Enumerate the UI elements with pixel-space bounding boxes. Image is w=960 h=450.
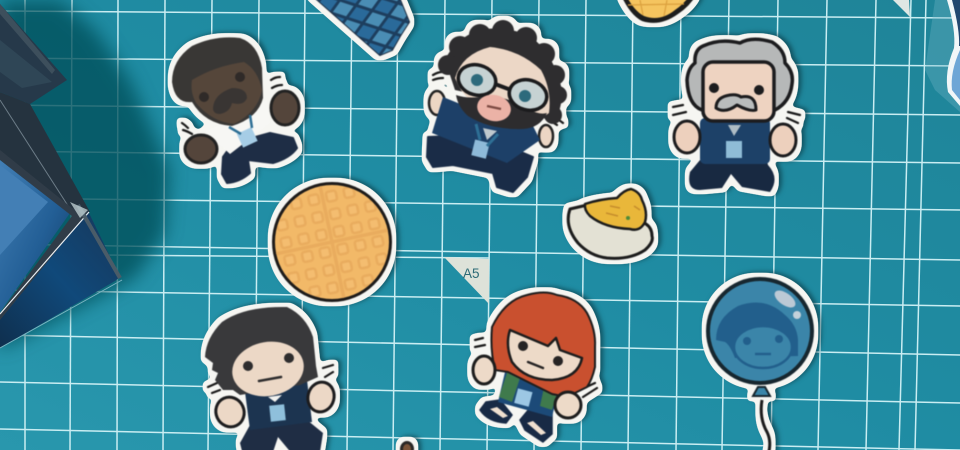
squiggles [182, 77, 282, 134]
legs [689, 155, 775, 192]
left hand [185, 135, 217, 163]
sticker: round waffle [268, 174, 402, 308]
nose [475, 92, 513, 124]
glasses [455, 61, 499, 99]
triangle mark: A5 [444, 257, 489, 304]
sticker: grey haired man with moustache [673, 39, 800, 192]
moustache [213, 88, 247, 114]
sticker: blue checker strip (top) [305, 0, 415, 60]
legs [480, 400, 552, 442]
moustache [716, 95, 756, 110]
plastic cases at left edge [0, 4, 122, 348]
squiggles [208, 365, 333, 393]
jacket [245, 380, 312, 430]
legs [222, 133, 297, 183]
squiggles [673, 105, 800, 123]
badge [514, 388, 533, 407]
scalloped hair [438, 20, 567, 124]
beard [456, 95, 547, 129]
balloon hair [716, 303, 798, 358]
sticker: waffle slice (top) [621, 0, 696, 23]
jacket [432, 97, 540, 163]
sticker: man with afro and moustache [172, 37, 299, 183]
squiggles [433, 72, 563, 125]
hands [473, 356, 495, 384]
balloon face [734, 326, 792, 368]
legs [240, 420, 323, 450]
face [455, 47, 550, 120]
sticker: deviled egg [568, 189, 652, 258]
face [228, 336, 308, 402]
sticker: bearded man with glasses [427, 20, 567, 192]
hair [205, 307, 318, 395]
arms [429, 91, 445, 115]
face [192, 62, 262, 124]
hands [674, 121, 700, 153]
right hand [271, 91, 299, 125]
hair [172, 37, 263, 126]
hair [491, 292, 595, 397]
body and vest [498, 372, 558, 417]
badge [726, 141, 742, 158]
shadow cast on the mat [0, 0, 170, 350]
sticker: dark haired man [205, 307, 337, 450]
top right plastic sleeve and sticker [893, 0, 960, 112]
triangle mark: A5: A5 [463, 266, 480, 281]
legs [427, 135, 533, 192]
hands [211, 392, 249, 432]
sticker: red haired woman [473, 292, 597, 442]
sticker: blue balloon with face [706, 277, 814, 450]
squiggles [475, 338, 597, 397]
face [508, 330, 582, 380]
sticker: small partial figure at bottom edge [400, 441, 414, 450]
badge [471, 140, 490, 159]
balloon reflection [772, 287, 798, 311]
face [703, 62, 774, 121]
jacket [700, 118, 770, 164]
badge [269, 404, 286, 422]
badge [237, 127, 258, 148]
hair [687, 39, 792, 110]
shirt [205, 100, 270, 154]
